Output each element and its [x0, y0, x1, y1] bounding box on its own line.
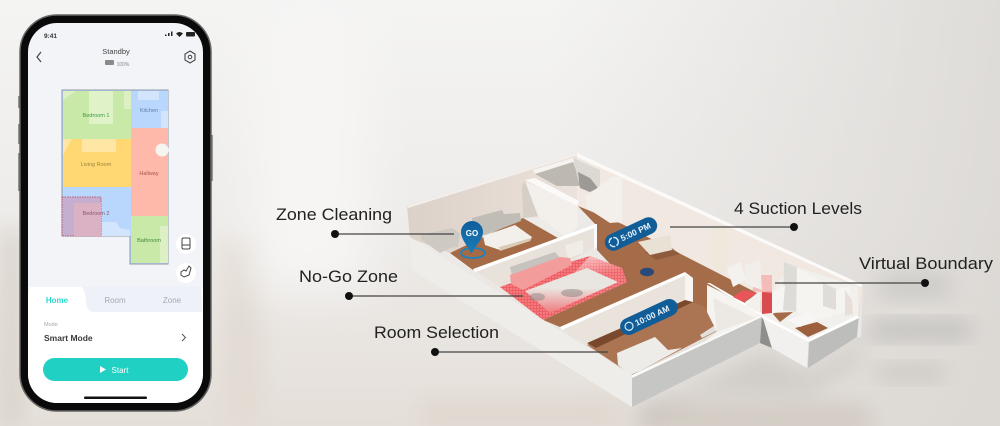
room: Bedroom 1 — [63, 91, 131, 139]
home indicator — [84, 396, 147, 399]
badge: 10:00 AM: 10:00 AM — [633, 303, 671, 328]
no-go zone red floor — [500, 256, 627, 320]
outer left wall face — [410, 237, 632, 407]
bottom panel: Zone — [163, 296, 182, 305]
callout: Virtual Boundary: Virtual Boundary — [859, 255, 994, 273]
phone body — [20, 15, 211, 411]
badge: 5:00 PM — [602, 214, 660, 254]
dining set — [638, 235, 680, 260]
callout: Room Selection: Room Selection — [374, 324, 499, 342]
room: Hallway: Hallway — [139, 171, 159, 177]
sofa — [510, 252, 572, 290]
notch shadow — [760, 315, 772, 348]
bottom panel: Room — [104, 296, 126, 305]
robot vacuum — [640, 268, 654, 276]
callout: 4 Suction Levels: 4 Suction Levels — [734, 200, 862, 218]
callout: Zone Cleaning: Zone Cleaning — [276, 206, 392, 224]
callout: Virtual Boundary — [775, 255, 994, 287]
callout: Zone Cleaning — [276, 206, 454, 238]
map outline — [62, 90, 168, 264]
callout: Room Selection — [374, 324, 608, 356]
bump right grey face — [808, 315, 859, 368]
room: Living Room — [63, 139, 131, 187]
right rooms interior — [762, 262, 859, 342]
bedroom divider block — [522, 178, 579, 238]
bedroom 1 bed — [472, 210, 532, 251]
room selection wall and floor — [560, 272, 719, 375]
status bar: 9:41 — [44, 33, 57, 40]
room: Bedroom 1: Bedroom 1 — [83, 113, 109, 119]
room: Living Room: Living Room — [81, 162, 112, 168]
floor plan illustration — [407, 153, 863, 425]
side cabinet — [565, 240, 583, 258]
rug — [525, 268, 618, 313]
callout: No-Go Zone: No-Go Zone — [299, 268, 398, 286]
bottom panel: Smart Mode — [44, 333, 93, 343]
screen — [28, 23, 203, 403]
room: Kitchen — [131, 91, 168, 128]
status bar — [44, 32, 195, 40]
bottom panel: Start — [112, 366, 129, 375]
side buttons — [19, 96, 212, 191]
room: Kitchen: Kitchen — [140, 108, 158, 114]
virtual boundary red floor — [733, 275, 785, 314]
phone — [19, 15, 212, 411]
desk — [420, 228, 460, 253]
header: Standby — [102, 47, 130, 68]
bottom panel — [28, 286, 203, 403]
partition bath — [700, 283, 762, 345]
room: Bathroom — [131, 216, 168, 263]
map tool buttons — [176, 234, 196, 283]
header: Standby: 100% — [117, 62, 130, 68]
callout: 4 Suction Levels — [670, 200, 862, 231]
pin: GO — [461, 221, 485, 258]
room: Hallway — [131, 128, 168, 216]
badge: 10:00 AM — [617, 296, 681, 338]
mode row: Mode — [44, 322, 58, 328]
room: Bedroom 2 with zone: Bedroom 2 — [83, 211, 109, 217]
badge: 5:00 PM: 5:00 PM — [619, 221, 652, 243]
kitchen units — [533, 158, 622, 223]
pin: GO: GO — [466, 229, 478, 238]
plan ground shadow — [640, 342, 860, 425]
door and furniture — [712, 225, 762, 290]
bump white face — [762, 315, 809, 368]
start button — [43, 358, 188, 381]
icon: settings — [185, 51, 195, 63]
callout: No-Go Zone — [299, 268, 523, 300]
header: Standby: Standby — [102, 47, 130, 56]
tabs: Home — [46, 296, 69, 305]
icon: back — [37, 52, 41, 62]
floor: bedroom 1 — [450, 218, 558, 270]
front corner walls — [410, 237, 863, 407]
map — [62, 90, 168, 264]
living room back wall — [473, 226, 597, 287]
room: Bedroom 2 with zone — [62, 187, 131, 236]
back wall bedroom — [407, 153, 577, 253]
outer front wall face — [632, 315, 762, 407]
rug pattern — [561, 289, 583, 297]
bedroom 3 bed — [617, 322, 722, 375]
floor: main hall and kitchen — [543, 206, 757, 346]
back wall long side — [577, 153, 863, 316]
partition wall rim bedroom / living — [473, 224, 597, 272]
room: Bathroom: Bathroom — [137, 238, 161, 244]
